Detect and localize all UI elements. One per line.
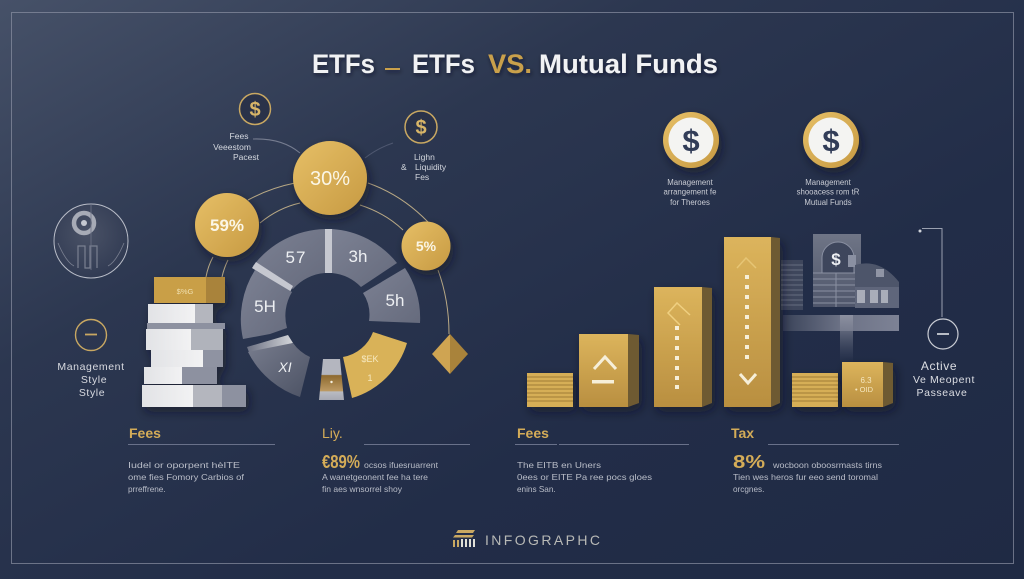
column: liquidity bbox=[322, 425, 470, 494]
column: liquidity: A wanetgeonent fee ha tere bbox=[322, 473, 428, 482]
label: active vs passive: Passeave bbox=[917, 387, 967, 399]
label: fees: Veeestom bbox=[213, 142, 251, 152]
label: management style: Management bbox=[57, 361, 125, 373]
icon: minus left bbox=[76, 320, 106, 350]
label: fees: Pacest bbox=[233, 152, 260, 162]
column: liquidity: Liy. bbox=[322, 425, 343, 441]
segment: gold: $EK bbox=[361, 354, 379, 364]
segment: 5h bbox=[363, 268, 420, 323]
column: tax: orcgnes. bbox=[733, 485, 764, 494]
column: fees right: The EITB en Uners bbox=[517, 461, 601, 470]
segment: gold bbox=[343, 332, 407, 398]
icon: dollar coin left bbox=[663, 112, 719, 168]
caption: left coin: arrangement fe bbox=[664, 188, 716, 196]
column: tax bbox=[731, 425, 899, 494]
label: liquidity fees: & bbox=[401, 162, 407, 172]
caption: right coin bbox=[797, 178, 860, 207]
segment: small centre bbox=[319, 359, 344, 400]
label: management style: Style bbox=[79, 387, 105, 399]
icon: diamond bbox=[432, 334, 468, 374]
column: fees left: prreffrene. bbox=[128, 485, 166, 494]
icon: dollar coin left: $ bbox=[682, 123, 700, 158]
caption: left coin: for Theroes bbox=[670, 198, 710, 207]
label: liquidity fees: Fes bbox=[415, 172, 429, 182]
circle: 55%: 59% bbox=[210, 216, 244, 235]
column: tax: Tax bbox=[731, 425, 754, 441]
segment: 5H bbox=[241, 270, 292, 339]
small gold box bbox=[842, 362, 893, 407]
bar 3 bbox=[724, 237, 780, 407]
segment: XI: XI bbox=[277, 359, 292, 375]
icon: minus right bbox=[928, 319, 958, 349]
label: liquidity fees bbox=[401, 152, 447, 182]
icon: left sphere bbox=[54, 204, 128, 278]
circle: 5%: 5% bbox=[416, 238, 437, 254]
horizontal band bbox=[783, 315, 899, 331]
segment: 57: 57 bbox=[286, 248, 306, 267]
title bbox=[312, 49, 718, 79]
column: fees right: enins San. bbox=[517, 485, 556, 494]
circle: 30%: 30% bbox=[310, 168, 350, 190]
icon: dollar outline left bbox=[240, 94, 270, 124]
segment: 5H: 5H bbox=[254, 297, 276, 316]
building illustration bbox=[781, 234, 899, 363]
donut chart bbox=[241, 229, 420, 400]
column: fees right bbox=[515, 425, 689, 494]
logo: infographic: INFOGRAPHC bbox=[485, 532, 600, 548]
title: Mutual Funds bbox=[539, 49, 718, 79]
column: liquidity: fin aes wnsorrel shoy bbox=[322, 485, 403, 494]
left building bbox=[781, 260, 803, 310]
gold block: $%G bbox=[177, 287, 193, 296]
column: tax: 8% bbox=[733, 452, 765, 472]
segment: 57 bbox=[253, 229, 325, 289]
circle: 55% bbox=[195, 193, 259, 257]
column: liquidity: ocsos ifuesruarrent bbox=[364, 461, 439, 470]
label: fees: Fees bbox=[230, 131, 248, 141]
segment: gold: 1 bbox=[367, 373, 373, 383]
label: fees bbox=[213, 131, 260, 162]
main building: $ bbox=[831, 250, 841, 269]
bar 2 bbox=[654, 287, 712, 407]
circle: 5% bbox=[402, 222, 450, 270]
caption: right coin: Management bbox=[805, 178, 852, 187]
title: VS. bbox=[488, 49, 532, 79]
title: ETFs bbox=[412, 49, 475, 79]
logo: infographic bbox=[453, 530, 600, 548]
coin stack left bbox=[527, 373, 573, 407]
label: management style bbox=[57, 361, 125, 399]
caption: left coin bbox=[664, 178, 716, 207]
vertical band bbox=[840, 315, 853, 363]
column: fees left: Fees bbox=[129, 425, 161, 441]
label: liquidity fees: Lighn bbox=[414, 152, 435, 162]
column: fees left bbox=[128, 425, 275, 494]
small gold box: • OID bbox=[855, 385, 874, 394]
segment: 3h: 3h bbox=[349, 247, 367, 266]
icon: dollar outline right bbox=[405, 111, 437, 143]
icon: dollar coin right bbox=[803, 112, 859, 168]
title: ETFs bbox=[312, 49, 375, 79]
bar 1 bbox=[579, 334, 639, 407]
column: tax: wocboon oboosrmasts tirns bbox=[772, 461, 882, 470]
coin stack right bbox=[792, 373, 838, 407]
label: active vs passive: Ve Meopent bbox=[913, 374, 975, 386]
label: active vs passive: Active bbox=[921, 359, 957, 373]
column: liquidity: €89% bbox=[322, 452, 360, 472]
connector arcs bbox=[206, 139, 449, 334]
column: fees right: 0ees or EITE Pa ree pocs gloes bbox=[517, 473, 652, 482]
house bbox=[855, 263, 899, 308]
column: fees left: Iudel or oporpent hèITE bbox=[128, 461, 241, 470]
label: active vs passive bbox=[913, 359, 975, 399]
callout line bbox=[918, 228, 942, 317]
icon: dollar coin right: $ bbox=[822, 123, 840, 158]
segment: 5h: 5h bbox=[386, 291, 404, 310]
segment: 3h bbox=[332, 229, 397, 287]
caption: right coin: Mutual Funds bbox=[804, 198, 852, 207]
icon: dollar outline right: $ bbox=[415, 117, 427, 139]
column: tax: Tien wes heros fur eeo send toromal bbox=[733, 473, 878, 482]
logo icon bbox=[453, 530, 475, 547]
label: liquidity fees: Liquidity bbox=[415, 162, 447, 172]
caption: left coin: Management bbox=[667, 178, 714, 187]
column: fees right: Fees bbox=[517, 425, 549, 441]
caption: right coin: shooacess rom tR bbox=[797, 188, 860, 196]
stack of blocks bbox=[142, 277, 246, 407]
small gold box: 6.3 bbox=[860, 376, 872, 385]
icon: dollar outline left: $ bbox=[249, 99, 261, 121]
label: management style: Style bbox=[81, 374, 107, 386]
segment: XI bbox=[248, 343, 310, 397]
column: fees left: ome fies Fomory Carbios of bbox=[128, 473, 245, 482]
circle: 30% bbox=[293, 141, 367, 215]
